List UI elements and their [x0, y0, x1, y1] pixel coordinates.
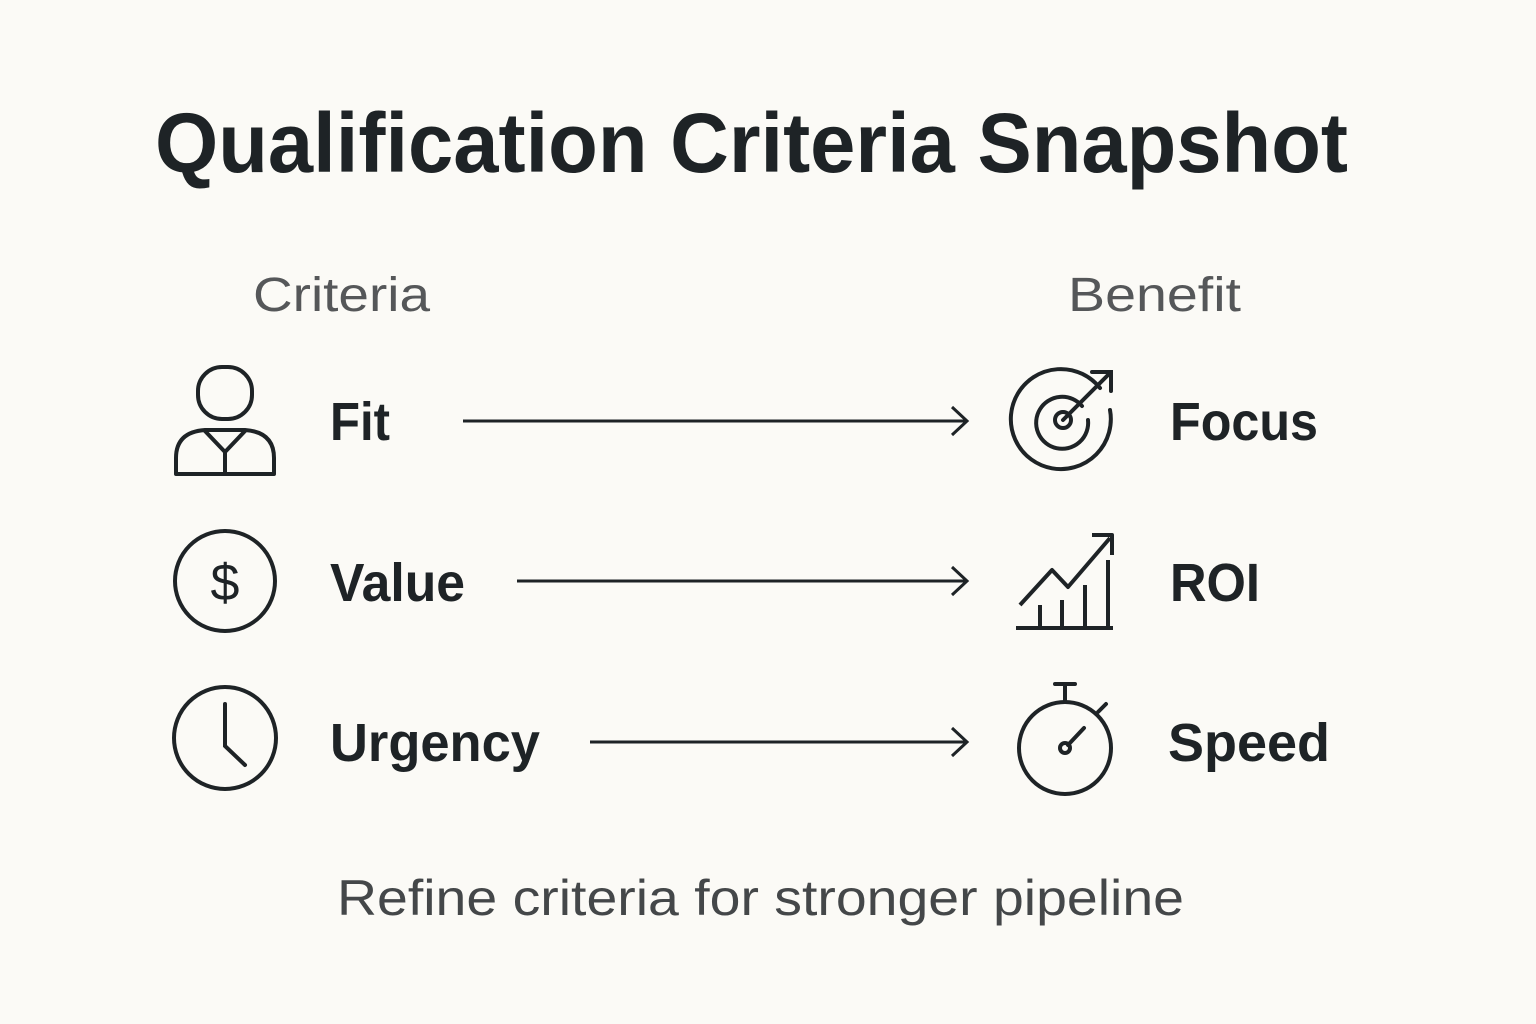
footer text: Refine criteria for stronger pipeline: [337, 870, 1184, 926]
arrow: fit: [463, 407, 967, 435]
label: fit: Fit: [330, 392, 390, 452]
arrow: value: [517, 567, 967, 595]
icon: dollar: $: [211, 554, 240, 612]
icon: person: [176, 367, 274, 474]
icon: target: [1011, 369, 1111, 469]
heading: criteria: Criteria: [253, 269, 430, 322]
row: fit to focus: [176, 367, 274, 474]
icon: clock: [174, 687, 276, 789]
label: roi: ROI: [1170, 553, 1260, 613]
arrow: urgency: [590, 728, 967, 756]
icon: stopwatch: [1019, 684, 1111, 794]
icon: dollar: [175, 531, 275, 631]
label: speed: Speed: [1168, 713, 1330, 773]
icon: chart: [1016, 535, 1113, 628]
label: urgency: Urgency: [330, 713, 540, 773]
label: value: Value: [330, 553, 465, 613]
label: focus: Focus: [1170, 392, 1318, 452]
title: Qualification Criteria Snapshot: [155, 96, 1348, 190]
heading: benefit: Benefit: [1068, 269, 1241, 322]
